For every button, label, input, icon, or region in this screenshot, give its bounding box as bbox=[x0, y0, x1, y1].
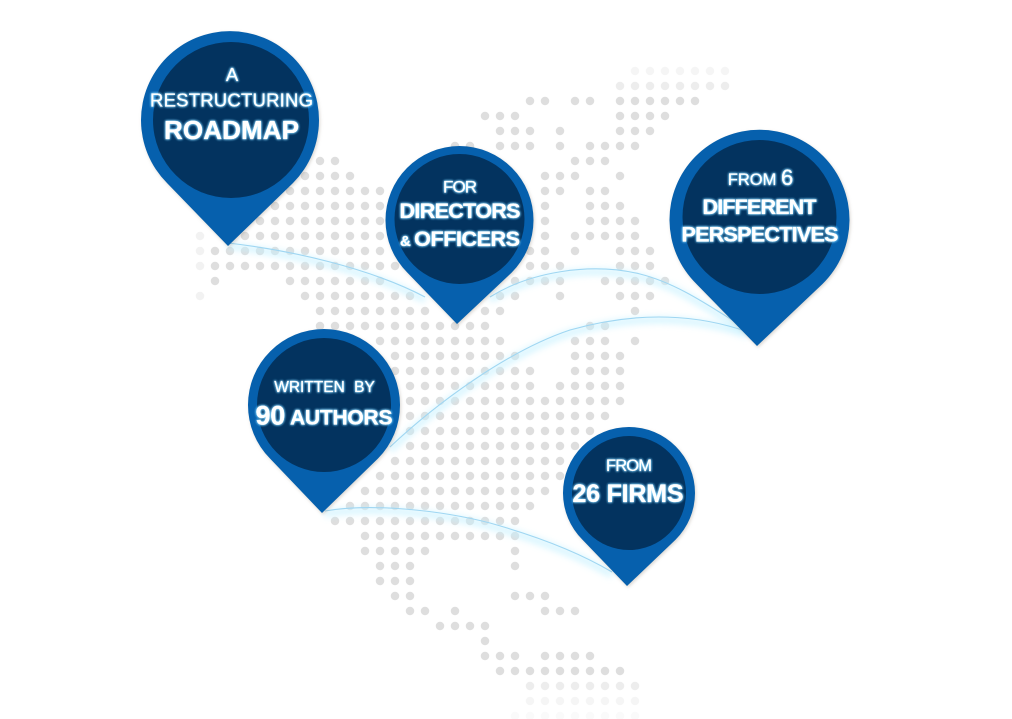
pin text: written by 90 authors: 90 AUTHORS bbox=[256, 400, 392, 430]
pin: a restructuring roadmap bbox=[141, 31, 319, 246]
pin text: for directors and officers: FOR bbox=[443, 178, 477, 196]
pin text: for directors and officers: DIRECTORS bbox=[400, 199, 520, 223]
pin text: a restructuring roadmap bbox=[150, 64, 313, 145]
pin text: written by 90 authors bbox=[256, 379, 392, 430]
pin text: for directors and officers: & OFFICERS bbox=[400, 227, 520, 251]
pin text: from 26 firms: FROM bbox=[606, 457, 652, 475]
pin text: from 6 different perspectives bbox=[682, 165, 838, 246]
pin: from 6 different perspectives bbox=[670, 130, 850, 346]
pin text: from 26 firms bbox=[572, 457, 684, 508]
pin text: a restructuring roadmap: RESTRUCTURING bbox=[150, 90, 313, 110]
pin text: from 6 different perspectives: FROM 6 bbox=[728, 165, 793, 190]
connecting light curves between pins bbox=[228, 243, 748, 575]
pin text: a restructuring roadmap: ROADMAP bbox=[164, 115, 299, 145]
pin text: from 6 different perspectives: PERSPECTIVES bbox=[682, 222, 838, 246]
pin: written by 90 authors bbox=[248, 329, 400, 513]
pin text: from 26 firms: 26 FIRMS bbox=[572, 480, 684, 508]
pin: for directors and officers bbox=[385, 146, 533, 324]
dotted world map background bbox=[200, 71, 725, 716]
pin text: written by 90 authors: WRITTEN BY bbox=[274, 379, 375, 396]
pin text: a restructuring roadmap: A bbox=[226, 64, 239, 85]
pin text: from 6 different perspectives: DIFFERENT bbox=[702, 195, 816, 219]
pin text: for directors and officers bbox=[400, 178, 520, 251]
pin: from 26 firms bbox=[563, 427, 695, 586]
